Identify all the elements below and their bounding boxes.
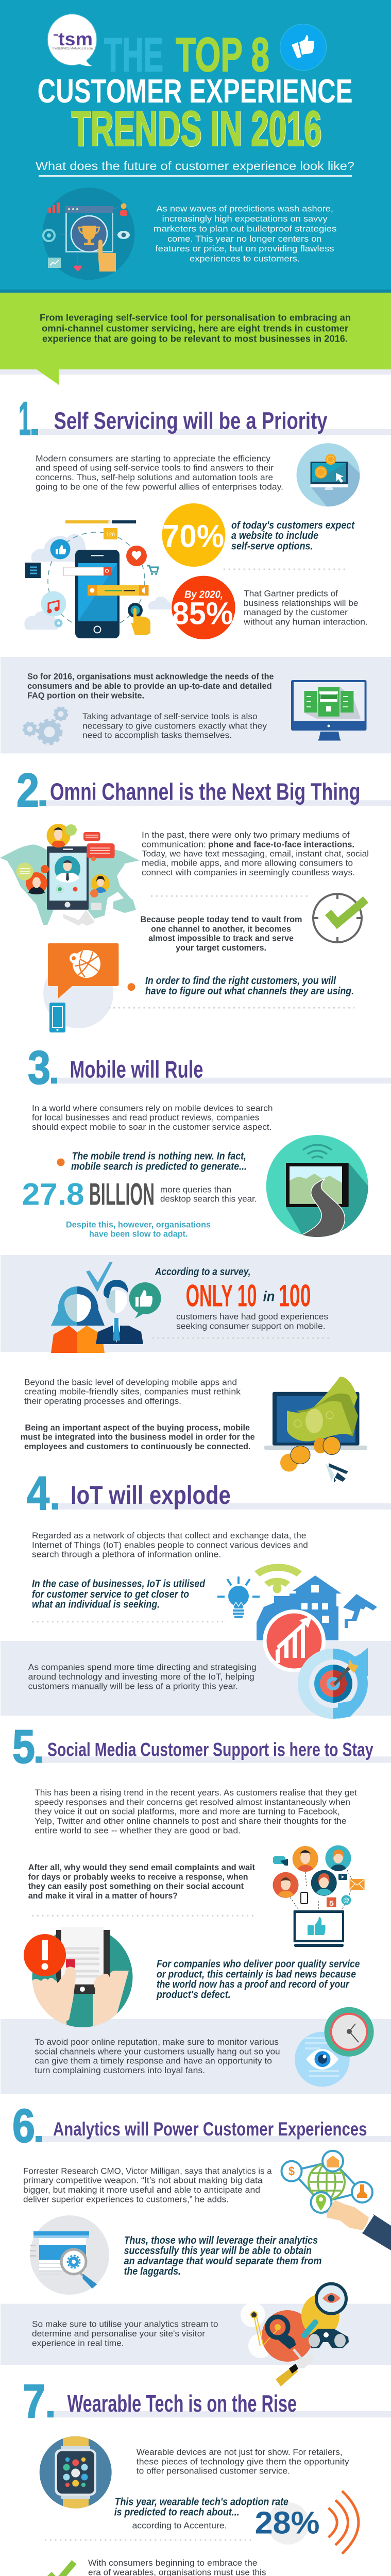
icon: tablet with road xyxy=(266,1135,368,1237)
heading 2: 2 xyxy=(16,764,39,817)
illustration: phone with apps xyxy=(24,520,173,638)
stat: only 10 in 100: seeking consumer support on mobile. xyxy=(176,1321,326,1331)
heading 4: IoT will explode xyxy=(71,1481,231,1510)
heading 4 xyxy=(27,1467,391,1520)
panel: organisations must acknowledge: consumers and be able to provide an up-to-date and detailed xyxy=(27,682,272,691)
body text: search through a plethora of information online. xyxy=(32,1550,221,1560)
illustration: two customers xyxy=(51,1262,161,1353)
heading 3: Mobile will Rule xyxy=(70,1056,203,1083)
stat: 70 percent xyxy=(162,503,355,567)
icon: thumbs up badge xyxy=(280,24,327,71)
italic callout: IoT: what an individual is seeking. xyxy=(32,1599,160,1611)
icon: smart watch xyxy=(40,2434,112,2511)
illustration: global network with hand: $ xyxy=(288,2164,295,2178)
body text: Yelp, Twitter and other online channels to post and share their thoughts for the xyxy=(35,1817,347,1826)
stat: only 10 in 100 xyxy=(155,1266,328,1331)
stat: 85 percent: business relationships will be xyxy=(244,599,359,608)
italic callout: leverage analytics: an advantage that would separate them from xyxy=(124,2256,321,2267)
illustration: social network xyxy=(273,1845,365,1947)
logo speech bubble: tsm xyxy=(58,28,93,49)
section 4: IoT xyxy=(1,1467,391,1719)
italic callout: bad news: the world now has a proof and record of your xyxy=(157,1979,350,1990)
bold text: email complaints: After all, why would they send email complaints and wait xyxy=(28,1863,255,1872)
heading 5 xyxy=(12,1721,391,1773)
illustration: social network: @ xyxy=(343,1896,349,1904)
bold text: buying process: Being an important aspect of the buying process, mobile xyxy=(25,1423,250,1432)
stat: 28 percent: is predicted to reach about... xyxy=(114,2507,240,2518)
panel: utilise analytics: So make sure to utilise your analytics stream to xyxy=(32,2320,218,2329)
body text: to offer personalised customer service. xyxy=(137,2467,290,2476)
illustration: connected home, chart and target xyxy=(217,1564,377,1719)
body text: these pieces of technology give them the opportunity xyxy=(137,2457,349,2466)
icon: orange bubble with globe and phone xyxy=(43,943,118,1032)
bold text: buying process xyxy=(21,1423,255,1451)
body text xyxy=(36,454,283,492)
illustration: social network: 5 xyxy=(329,1899,334,1907)
logo speech bubble xyxy=(47,14,97,66)
heading 7 xyxy=(23,2375,391,2428)
italic callout: bad news: product's defect. xyxy=(156,1989,231,2001)
panel: investing in IoT xyxy=(1,1641,391,1716)
bold text: channels: one channel to another, it becomes xyxy=(151,924,291,934)
illustration: gears, magnifier and binoculars xyxy=(241,2284,349,2386)
italic callout: leverage analytics xyxy=(124,2235,321,2277)
title: THE xyxy=(104,28,163,81)
italic callout: mobile: The mobile trend is nothing new. In fact, xyxy=(72,1151,246,1162)
icon: signal arcs xyxy=(329,2491,359,2554)
stat: 27.8 billion xyxy=(22,1177,257,1211)
body text: communication: xyxy=(142,840,206,849)
stat: only 10 in 100: 100 xyxy=(279,1279,311,1313)
body text: for local businesses and read product reviews, companies xyxy=(32,1113,259,1123)
section 3: mobile xyxy=(1,1041,391,1483)
panel: organisations must acknowledge xyxy=(1,657,391,753)
panel: organisations must acknowledge: Taking advantage of self-service tools is also xyxy=(82,712,258,721)
stat: only 10 in 100: ONLY 10 xyxy=(186,1279,257,1313)
stat: 70 percent: self-serve options. xyxy=(231,541,313,552)
italic callout: bad news: or product, this certainly is bad news because xyxy=(157,1969,356,1980)
body text: bigger, but making it more useful and able to anticipate and xyxy=(23,2185,260,2195)
panel: green summary band: omni-channel customer servicing, here are eight trends in customer xyxy=(42,323,348,333)
stat: 27.8 billion: BILLION xyxy=(89,1177,155,1211)
illustration: world map with phone xyxy=(0,824,140,926)
logo speech bubble: theSERVICEMANAGER.com xyxy=(53,47,93,50)
bold text: email complaints xyxy=(28,1863,255,1901)
italic callout: IoT: In the case of businesses, IoT is utilised xyxy=(32,1579,206,1590)
heading 6 xyxy=(12,2100,391,2153)
body text: rethink xyxy=(24,1378,241,1406)
body text: speedy responses and their concerns get resolved almost instantaneously when xyxy=(35,1798,350,1807)
illustration: global network with hand xyxy=(281,2151,391,2250)
bold text: channels: Because people today tend to vault from xyxy=(140,915,302,924)
title: TOP 8 xyxy=(176,28,269,81)
stat: only 10 in 100: According to a survey, xyxy=(155,1266,250,1278)
icon: website magnifier xyxy=(30,2215,109,2295)
section 5: social media xyxy=(1,1721,391,2094)
section 2: omni channel xyxy=(0,764,391,1032)
stat: 27.8 billion: desktop search this year. xyxy=(160,1194,257,1204)
heading 7: 7 xyxy=(23,2375,45,2428)
body text: Wearable devices are not just for show. For retailers, xyxy=(137,2448,343,2457)
body text: rethink: Beyond the basic level of developing mobile apps and xyxy=(24,1378,237,1387)
note: slow to adapt: Despite this, however, organisations xyxy=(66,1220,211,1229)
bold text: buying process: employees and customers to continuously be connected. xyxy=(24,1442,250,1451)
intro text: increasingly high expectations on savvy xyxy=(162,214,328,224)
heading 7: Wearable Tech is on the Rise xyxy=(67,2390,297,2417)
panel: monitor reputation: turn complaining customers into loyal fans. xyxy=(35,2066,205,2075)
intro text xyxy=(154,205,336,264)
body text: In the past, there were only two primary mediums of xyxy=(142,831,350,840)
panel: monitor reputation xyxy=(1,2007,391,2094)
body text: Today, we have text messaging, email, instant chat, social xyxy=(142,849,369,858)
bold text: channels xyxy=(140,915,302,953)
body text: This has been a rising trend in the recent years. As customers realise that they get xyxy=(35,1788,357,1798)
bold text: email complaints: they can easily post something on their social account xyxy=(28,1882,244,1891)
check note: With consumers beginning to embrace the xyxy=(88,2558,258,2568)
stat: 85 percent: without any human interaction. xyxy=(243,617,368,626)
subtitle xyxy=(36,159,354,177)
body text: going to be one of the few powerful allies of enterprises today. xyxy=(36,482,283,492)
body text: deliver superior experiences to customers,” he adds. xyxy=(23,2195,229,2204)
body text: concerns. Thus, self-help solutions and automation tools are xyxy=(36,473,273,482)
italic callout: channels: have to figure out what channels they are using. xyxy=(145,986,354,997)
panel: investing in IoT: customers manually will be less of a priority this year. xyxy=(28,1682,238,1691)
heading 3 xyxy=(28,1041,391,1094)
heading 1 xyxy=(19,393,391,445)
italic callout: mobile xyxy=(57,1151,247,1173)
italic callout: bad news xyxy=(156,1958,360,2001)
intro text: As new waves of predictions wash ashore, xyxy=(157,205,333,214)
body text: and speed of using self-service tools to find answers to their xyxy=(36,464,274,473)
title xyxy=(38,28,353,156)
body text: Modern consumers are starting to appreciate the efficiency xyxy=(36,454,271,463)
illustration: phone with apps: 120 xyxy=(106,532,115,538)
icon: gears xyxy=(23,707,67,744)
heading 4: 4 xyxy=(27,1467,49,1520)
body text: primary competitive weapon. “It’s not about making big data xyxy=(23,2176,263,2185)
body text: they voice it out on social platforms, more and more are turning to Facebook, xyxy=(35,1807,340,1817)
intro text: come. This year no longer centers on xyxy=(167,234,321,244)
stat: 85 percent xyxy=(172,576,368,639)
stat: 70 percent: a website to include xyxy=(231,530,318,541)
body text xyxy=(137,2448,349,2476)
bold text: email complaints: for days or probably weeks to receive a response, when xyxy=(28,1872,248,1882)
note: slow to adapt: have been slow to adapt. xyxy=(89,1230,188,1239)
panel: survey xyxy=(1,1255,391,1353)
panel: organisations must acknowledge: need to accomplish tasks themselves. xyxy=(82,731,232,740)
icon: clock with check xyxy=(313,894,366,942)
body text: In a world where consumers rely on mobile devices to search xyxy=(32,1104,273,1113)
body text xyxy=(32,1104,273,1132)
body text: Regarded as a network of objects that collect and exchange data, the xyxy=(32,1531,306,1540)
body text: entire world to see -- whether they are good or bad. xyxy=(35,1826,241,1835)
heading 1: Self Servicing will be a Priority xyxy=(54,408,328,434)
italic callout: channels: In order to find the right customers, you will xyxy=(145,975,336,987)
body text xyxy=(35,1788,357,1835)
heading 1: 1 xyxy=(19,393,31,445)
stat: only 10 in 100: in xyxy=(263,1289,275,1304)
italic callout: channels xyxy=(128,975,354,997)
panel: utilise analytics: experience in real time. xyxy=(32,2338,124,2348)
panel: organisations must acknowledge: So for 2016, organisations must acknowledge the needs of the xyxy=(27,672,274,682)
stat: 27.8 billion: 27.8 xyxy=(22,1177,84,1211)
italic callout: bad news: For companies who deliver poor quality service xyxy=(157,1958,360,1970)
bold text: email complaints: and make it viral in a matter of hours? xyxy=(28,1891,178,1901)
heading 5: 5 xyxy=(12,1721,35,1773)
body text: rethink: creating mobile-friendly sites, companies must rethink xyxy=(24,1387,241,1397)
panel: investing in IoT: around technology and investing more of the IoT, helping xyxy=(28,1672,254,1682)
icon: trophy illustration xyxy=(42,188,135,280)
body text: Forrester Research CMO, Victor Milligan, says that analytics is a xyxy=(23,2166,272,2176)
bold text: channels: almost impossible to track and serve xyxy=(148,934,294,943)
stat: 28 percent xyxy=(114,2491,359,2554)
panel: organisations must acknowledge: FAQ portion on their website. xyxy=(27,691,144,700)
stat: 85 percent: By 2020, xyxy=(184,589,223,601)
body text xyxy=(142,831,369,877)
body text: rethink: their operating processes and offerings. xyxy=(24,1397,181,1406)
note: slow to adapt xyxy=(66,1220,211,1239)
panel: investing in IoT: As companies spend more time directing and strategising xyxy=(28,1663,257,1672)
panel: green summary band: experience that are going to be relevant to most businesses in 2016. xyxy=(42,334,348,344)
italic callout: mobile: mobile search is predicted to generate... xyxy=(71,1161,247,1173)
panel: utilise analytics: determine and personalise your site's visitor xyxy=(32,2329,206,2338)
heading 3: 3 xyxy=(28,1041,50,1094)
panel: green summary band xyxy=(0,293,391,385)
section 1: self servicing xyxy=(1,393,391,753)
icon: clock and eye xyxy=(295,2007,374,2087)
stat: 85 percent: That Gartner predicts of xyxy=(244,589,338,599)
icon: monitor with store xyxy=(291,680,367,741)
body text: media, mobile apps, and more allowing consumers to xyxy=(142,859,353,868)
body text: Internet of Things (IoT) enables people to connect various devices and xyxy=(32,1540,308,1550)
stat: 28 percent: This year, wearable tech's adoption rate xyxy=(115,2497,288,2508)
heading 6: 6 xyxy=(12,2100,35,2153)
body text: should expect mobile to soar in the customer service aspect. xyxy=(32,1123,272,1132)
stat: only 10 in 100: customers have had good experiences xyxy=(176,1312,328,1321)
panel: monitor reputation: social channels where your customers usually hang out so you xyxy=(35,2047,280,2056)
body text: connect with companies in seemingly countless ways. xyxy=(142,868,355,877)
stat: 28 percent: 28% xyxy=(255,2505,319,2540)
body text xyxy=(32,1531,308,1560)
panel: organisations must acknowledge: necessary to give customers exactly what they xyxy=(82,721,267,731)
italic callout: leverage analytics: successfully this year will be able to obtain xyxy=(124,2245,312,2257)
panel: green summary band: From leveraging self-service tool for personalisation to embracing an xyxy=(40,313,351,323)
subtitle: What does the future of customer experience look like? xyxy=(36,159,354,173)
body text xyxy=(23,2166,272,2204)
panel: monitor reputation: can give them a timely response and have an opportunity to xyxy=(35,2057,272,2066)
intro text: features or price, but on providing flawless xyxy=(156,244,334,253)
section 6: analytics xyxy=(1,2100,391,2386)
heading 2 xyxy=(16,764,391,817)
intro text: marketers to plan out bulletproof strategies xyxy=(154,225,336,234)
panel: header xyxy=(0,0,391,293)
icon: laptop with money xyxy=(264,1377,367,1483)
italic callout: IoT: for customer service to get closer to xyxy=(32,1589,189,1600)
section 7: wearable tech xyxy=(24,2384,391,2576)
bold text: buying process: must be integrated into the business model in order for the xyxy=(21,1433,255,1442)
panel: utilise analytics xyxy=(1,2284,391,2386)
stat: 85 percent: managed by the customer xyxy=(244,608,348,617)
stat: 70 percent: of today's customers expect xyxy=(231,520,355,531)
panel: monitor reputation: To avoid poor online reputation, make sure to monitor various xyxy=(35,2038,279,2047)
stat: 27.8 billion: more queries than xyxy=(160,1185,231,1194)
italic callout: leverage analytics: the laggards. xyxy=(124,2266,181,2277)
bold text: channels: your target customers. xyxy=(176,943,266,953)
stat: 70 percent: 70% xyxy=(162,519,224,554)
intro text: experiences to customers. xyxy=(190,255,300,264)
icon: monitor with coins xyxy=(297,443,363,510)
stat: 28 percent: according to Accenture. xyxy=(132,2521,227,2531)
stat: 85 percent: 85% xyxy=(172,596,233,631)
italic callout: leverage analytics: Thus, those who will leverage their analytics xyxy=(124,2235,318,2246)
body text: phone and face-to-face interactions. xyxy=(208,840,354,849)
italic callout: IoT xyxy=(32,1579,206,1611)
check note xyxy=(49,2558,266,2576)
illustration: hand holding phone with alert xyxy=(24,1927,133,2035)
